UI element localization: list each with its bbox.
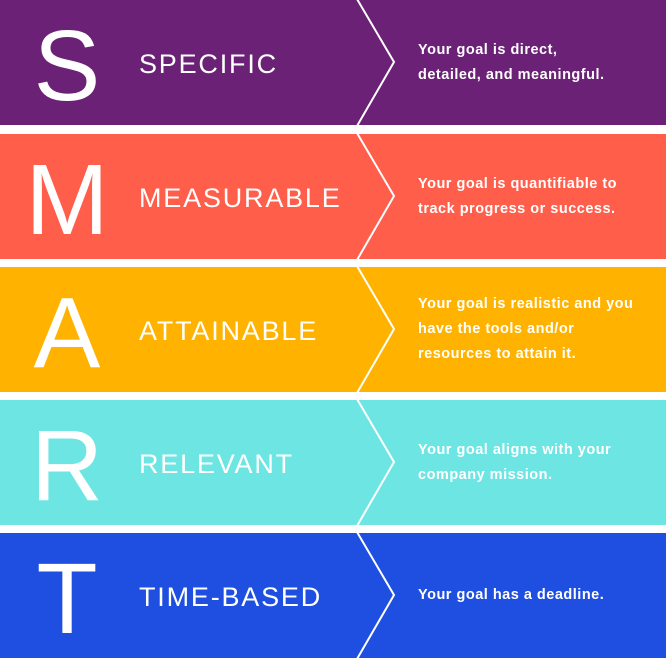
description: have the tools and/or	[418, 321, 574, 337]
description: Your goal aligns with your	[418, 442, 611, 458]
label measurable: MEASURABLE	[139, 183, 342, 213]
row: attainable	[0, 267, 666, 392]
label attainable: ATTAINABLE	[139, 316, 318, 346]
row: relevant	[0, 400, 666, 525]
letter M: M	[25, 144, 109, 256]
description: track progress or success.	[418, 200, 616, 216]
letter T: T	[36, 543, 98, 655]
label specific: SPECIFIC	[139, 49, 278, 79]
description: Your goal is direct,	[418, 42, 557, 58]
letter R: R	[31, 410, 103, 522]
description: Your goal has a deadline.	[418, 587, 604, 603]
letter A: A	[34, 277, 100, 389]
label time-based: TIME-BASED	[139, 582, 322, 612]
row: measurable	[0, 134, 666, 259]
description	[418, 42, 605, 82]
description	[418, 442, 611, 482]
label relevant: RELEVANT	[139, 449, 294, 479]
description	[418, 176, 617, 216]
description: detailed, and meaningful.	[418, 66, 605, 82]
description: Your goal is realistic and you	[418, 296, 633, 312]
description: company mission.	[418, 466, 553, 482]
letter S: S	[34, 10, 100, 122]
description	[418, 296, 633, 362]
description: resources to attain it.	[418, 346, 576, 362]
description: Your goal is quantifiable to	[418, 176, 617, 192]
row: time-based	[0, 533, 666, 658]
row: specific	[0, 0, 666, 125]
